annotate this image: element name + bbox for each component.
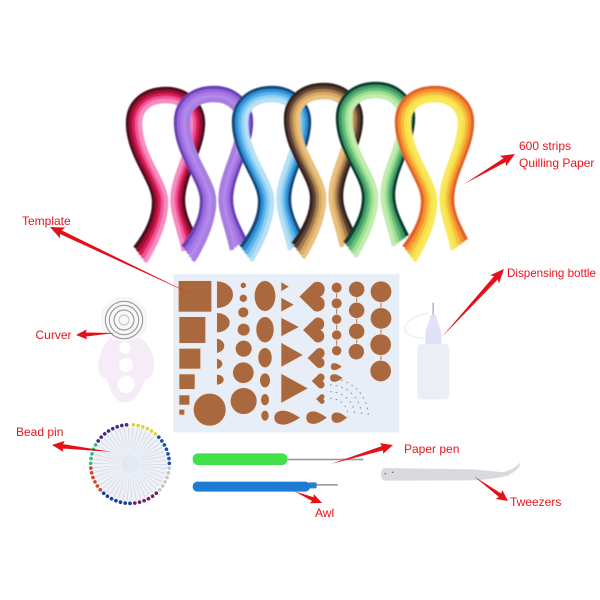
label: Curver: Curver xyxy=(36,328,72,342)
arrow: bead pin xyxy=(51,440,112,457)
printed measuring ticks xyxy=(330,378,368,417)
cork ovals xyxy=(254,281,276,421)
cork squares xyxy=(178,281,212,415)
cork teardrops xyxy=(274,363,347,425)
dark blue heads xyxy=(101,491,132,505)
strip loop: red xyxy=(128,89,203,262)
cork half circles xyxy=(217,281,233,385)
strip loop: brown xyxy=(286,85,361,258)
label: Tweezers: Tweezers xyxy=(510,495,561,509)
awl xyxy=(193,482,338,492)
yellow heads xyxy=(131,423,158,436)
paper pen xyxy=(193,453,363,465)
curver body xyxy=(98,337,154,403)
label: Paper pen: Paper pen xyxy=(404,442,459,456)
template sheet xyxy=(173,274,399,432)
label: 600 strips Quilling Paper: 600 strips xyxy=(519,139,571,153)
cork hearts xyxy=(299,281,325,404)
label: Template: Template xyxy=(22,214,71,228)
label: Awl: Awl xyxy=(315,506,334,520)
bead pin wheel xyxy=(89,423,171,505)
grey heads xyxy=(157,466,171,492)
cork triangles xyxy=(281,282,308,403)
arrow: template xyxy=(47,222,195,300)
curver ring plate xyxy=(101,297,147,343)
curver tool xyxy=(98,297,154,403)
dispensing bottle xyxy=(405,303,449,399)
arrow: tweezers xyxy=(471,472,511,505)
pin shafts xyxy=(107,441,153,487)
arrow: paper pen xyxy=(329,440,395,469)
curver holes xyxy=(117,343,135,393)
label: Bead pin: Bead pin xyxy=(16,425,63,439)
arrow: dispensing bottle xyxy=(437,265,508,342)
green heads xyxy=(89,442,98,465)
blue heads xyxy=(156,435,171,465)
purple heads xyxy=(96,423,129,443)
strip loop: orange and yellow xyxy=(397,88,472,261)
maroon heads xyxy=(133,491,159,505)
red heads xyxy=(89,466,103,492)
cork circles xyxy=(193,282,257,426)
cork circle columns xyxy=(331,281,392,382)
strip loop: green xyxy=(338,84,413,257)
arrow: curver xyxy=(76,328,115,340)
strip loop: purple xyxy=(176,88,251,261)
tweezers xyxy=(381,462,521,481)
arrow: awl xyxy=(292,487,324,508)
label: Dispensing bottle: Dispensing bottle xyxy=(507,267,596,280)
label: 600 strips Quilling Paper: Quilling Paper xyxy=(519,156,594,170)
quilling paper strips xyxy=(128,84,472,262)
arrow: 600 strips xyxy=(461,149,518,189)
strip loop: blue xyxy=(234,88,309,261)
